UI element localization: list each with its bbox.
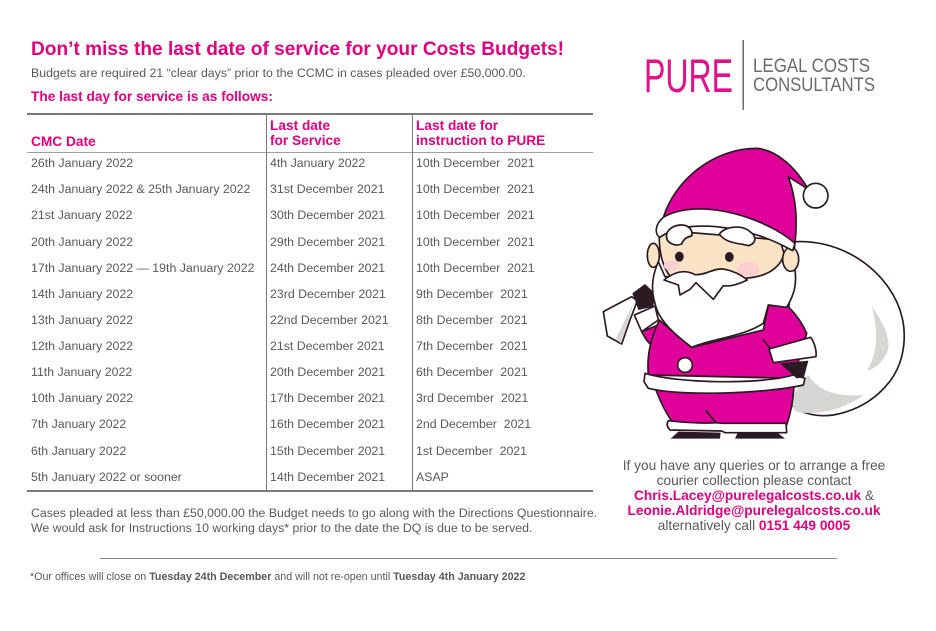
- title: Don’t miss the last date of service for your Costs Budgets!: [31, 39, 564, 60]
- table rows: 1st December 2021: [416, 444, 527, 458]
- table: service dates: [27, 113, 593, 492]
- note under table: [31, 506, 597, 535]
- note under table: Cases pleaded at less than £50,000.00 the Budget needs to go along with the Directions Questionnaire.: [31, 506, 597, 520]
- table rows: 10th December 2021: [416, 156, 535, 170]
- footer rule: [100, 558, 837, 559]
- intro text: Budgets are required 21 “clear days” prior to the CCMC in cases pleaded over £50,000.00.: [31, 66, 526, 80]
- table rows: 11th January 2022: [31, 365, 132, 379]
- table rows: 17th December 2021: [270, 391, 385, 405]
- table rows: 10th December 2021: [416, 208, 535, 222]
- table rows: 20th January 2022: [31, 235, 133, 249]
- table rows: 7th January 2022: [31, 417, 126, 431]
- logo: LEGAL COSTS: [753, 55, 870, 77]
- table rows: 31st December 2021: [270, 182, 384, 196]
- contact block: [623, 458, 885, 533]
- table rows: 29th December 2021: [270, 235, 385, 249]
- table rows: 5th January 2022 or sooner: [31, 470, 182, 484]
- table rows: 20th December 2021: [270, 365, 385, 379]
- table rows: 13th January 2022: [31, 313, 133, 327]
- table rows: [31, 156, 535, 484]
- table header: last date for service: Last date: [270, 118, 330, 133]
- contact block: If you have any queries or to arrange a free: [623, 458, 885, 473]
- table rows: 24th January 2022 & 25th January 2022: [31, 182, 250, 196]
- table rows: 10th January 2022: [31, 391, 133, 405]
- contact block: Chris.Lacey@purelegalcosts.co.uk &: [634, 488, 874, 503]
- table rows: 8th December 2021: [416, 313, 528, 327]
- table rows: 22nd December 2021: [270, 313, 389, 327]
- table rows: 7th December 2021: [416, 339, 528, 353]
- table rows: 6th December 2021: [416, 365, 528, 379]
- table rows: 10th December 2021: [416, 182, 535, 196]
- table rows: 26th January 2022: [31, 156, 133, 170]
- table header: CMC date: CMC Date: [31, 134, 96, 149]
- table rows: 14th December 2021: [270, 470, 385, 484]
- contact block: courier collection please contact: [657, 473, 851, 488]
- footnote: *Our offices will close on Tuesday 24th December and will not re-open until Tuesday 4th January 2022: [30, 571, 525, 583]
- illustration: pink Santa with sack: [602, 148, 906, 439]
- table rows: 16th December 2021: [270, 417, 385, 431]
- table rows: 2nd December 2021: [416, 417, 531, 431]
- table rows: 15th December 2021: [270, 444, 385, 458]
- logo: PURE: [644, 49, 733, 102]
- table rows: 23rd December 2021: [270, 287, 386, 301]
- table rows: 24th December 2021: [270, 261, 385, 275]
- table rows: 10th December 2021: [416, 235, 535, 249]
- table rows: 17th January 2022 — 19th January 2022: [31, 261, 254, 275]
- table header: last date for instruction: [416, 118, 545, 148]
- table rows: 14th January 2022: [31, 287, 133, 301]
- table rows: 21st December 2021: [270, 339, 384, 353]
- table rows: 10th December 2021: [416, 261, 535, 275]
- contact block: alternatively call 0151 449 0005: [658, 518, 850, 533]
- table rows: 4th January 2022: [270, 156, 365, 170]
- table rows: 12th January 2022: [31, 339, 133, 353]
- logo: [644, 40, 875, 110]
- table rows: ASAP: [416, 470, 449, 484]
- table header: last date for instruction: Last date for: [416, 118, 498, 133]
- note under table: We would ask for Instructions 10 working days* prior to the date the DQ is due to be served.: [31, 521, 532, 535]
- subheading: The last day for service is as follows:: [31, 89, 273, 104]
- table header: last date for service: [270, 118, 341, 148]
- table header: last date for service: for Service: [270, 133, 341, 148]
- table rows: 9th December 2021: [416, 287, 528, 301]
- contact block: Leonie.Aldridge@purelegalcosts.co.uk: [628, 503, 880, 518]
- table rows: 6th January 2022: [31, 444, 126, 458]
- table rows: 30th December 2021: [270, 208, 385, 222]
- table rows: 21st January 2022: [31, 208, 132, 222]
- table rows: 3rd December 2021: [416, 391, 528, 405]
- table header: last date for instruction: instruction to PURE: [416, 133, 545, 148]
